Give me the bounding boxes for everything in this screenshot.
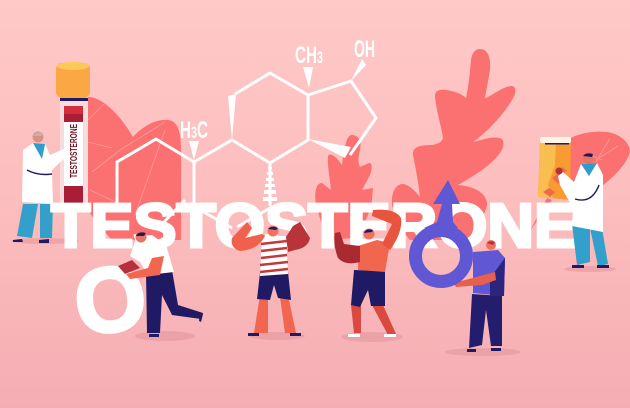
leaf: left large xyxy=(88,97,181,240)
doctor left xyxy=(13,132,71,243)
wedge bonds xyxy=(189,59,366,201)
formula labels: H3C xyxy=(180,117,208,144)
title: TESTOSTERONE xyxy=(51,192,577,261)
man in striped shirt xyxy=(232,222,310,336)
doctor right xyxy=(556,152,609,268)
icon: male symbol xyxy=(416,180,466,282)
pill bottle xyxy=(538,137,571,200)
leaf: right behind doctor xyxy=(530,132,630,231)
man flexing muscles xyxy=(334,210,401,337)
leaf: centre oak xyxy=(315,135,373,240)
molecule diagram xyxy=(117,59,376,228)
man holding male symbol xyxy=(454,240,505,352)
man pushing O xyxy=(118,232,203,337)
ground shadows xyxy=(11,238,616,356)
big letter O: O xyxy=(69,246,151,355)
test tube xyxy=(56,62,90,208)
formula labels: CH3 xyxy=(295,42,323,69)
formula labels: OH xyxy=(354,36,375,63)
formula labels xyxy=(180,36,375,144)
tube label: TESTOSTERONE xyxy=(69,124,80,178)
leaf: right large xyxy=(392,49,515,240)
